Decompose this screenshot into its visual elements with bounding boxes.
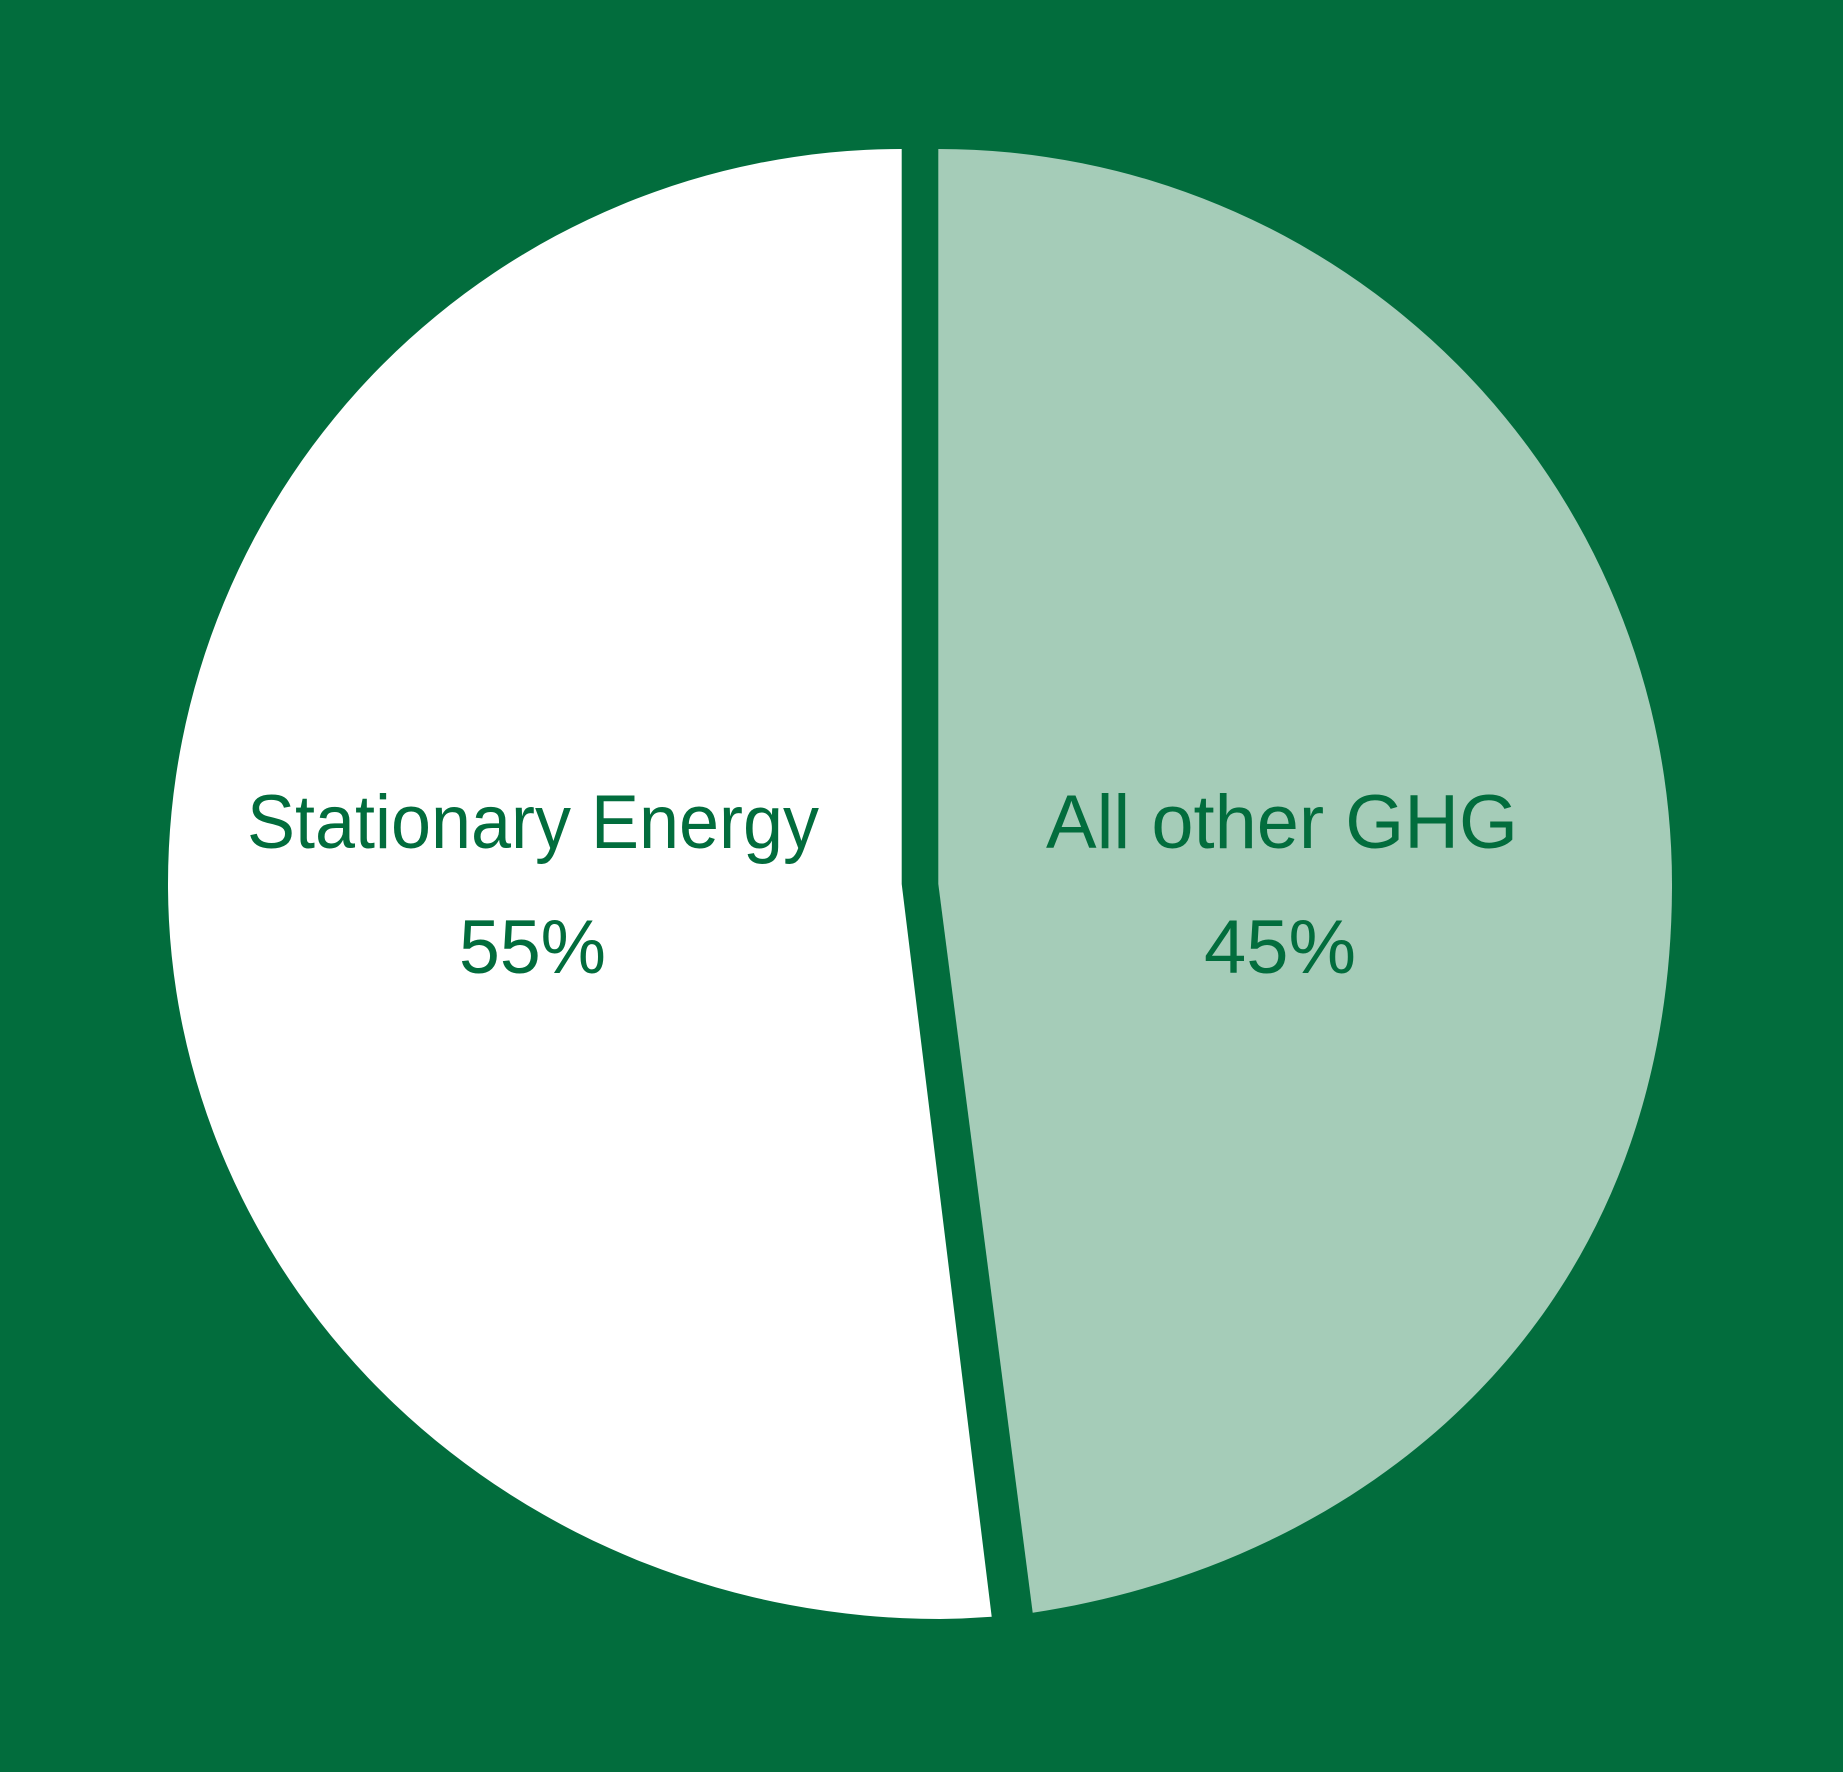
label: Stationary Energy: Stationary Energy	[247, 780, 819, 865]
pie slice: All other GHG 45%	[938, 149, 1672, 1613]
label: All other GHG: All other GHG	[1046, 780, 1518, 865]
value: 55%: 55%	[459, 905, 606, 990]
value: 45%: 45%	[1204, 905, 1356, 990]
pie slice: Stationary Energy 55%	[168, 149, 992, 1619]
